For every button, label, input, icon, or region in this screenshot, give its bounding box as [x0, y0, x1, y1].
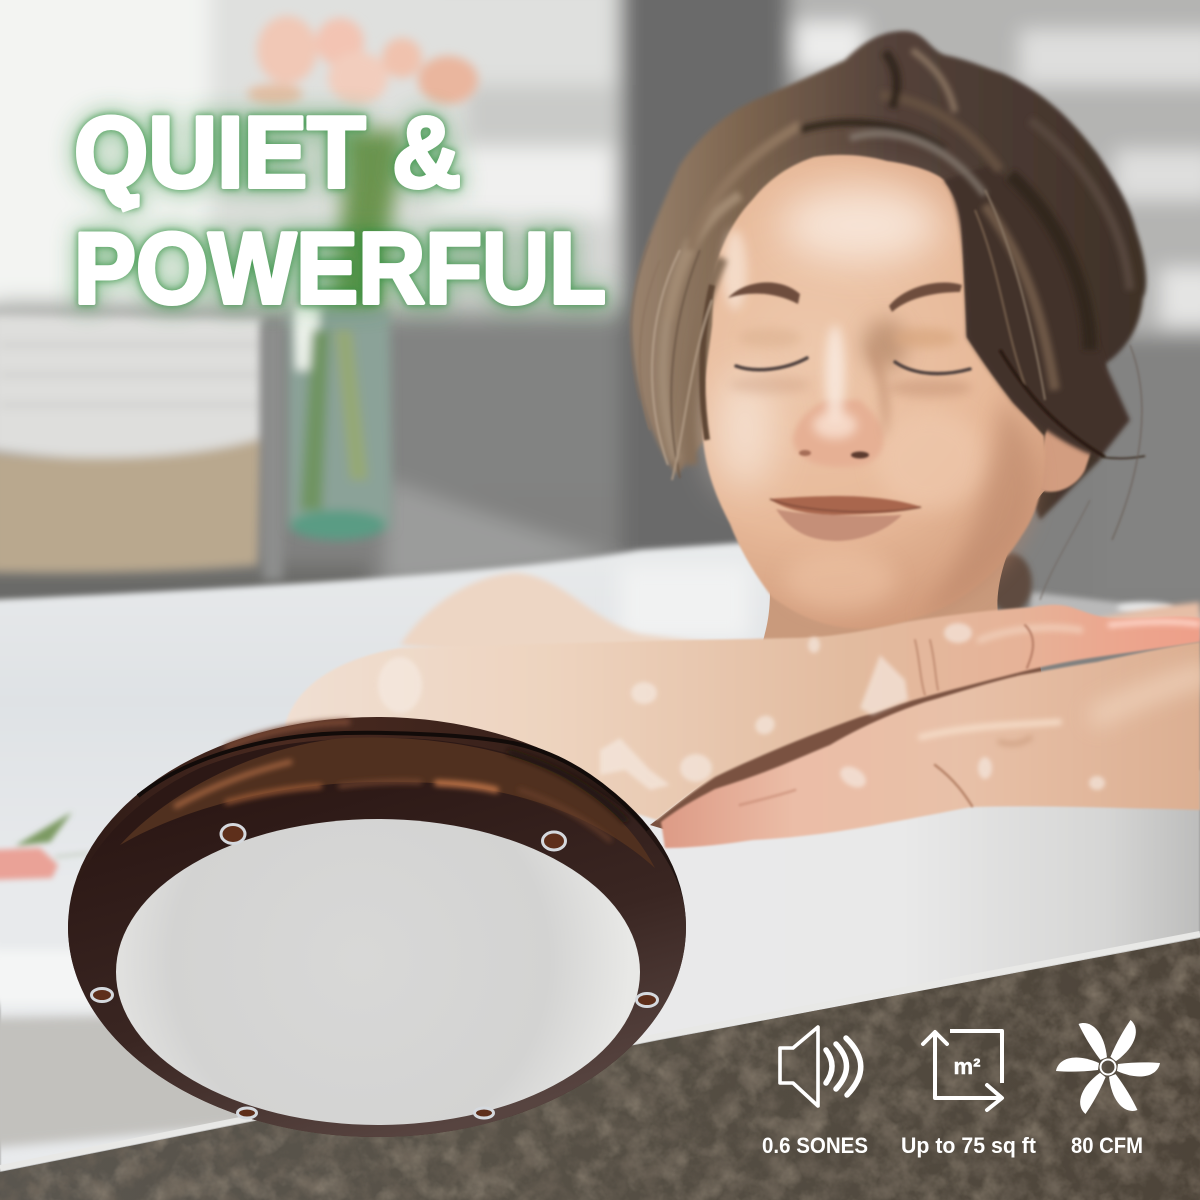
title glow: QUIET & [74, 97, 461, 209]
icon: fan [1056, 1017, 1160, 1117]
front ring [68, 738, 686, 1137]
label: area: Up to 75 sq ft [901, 1133, 1037, 1158]
far arm behind the hand [1100, 602, 1200, 640]
hair back [631, 31, 1146, 520]
woman [285, 31, 1200, 848]
frosted glass lens [116, 819, 640, 1125]
title [74, 97, 606, 325]
label: airflow: 80 CFM [1071, 1133, 1143, 1158]
eyebrows [728, 282, 962, 312]
title: POWERFUL [74, 213, 606, 325]
face highlights and shading [715, 187, 1036, 618]
icon: speaker [780, 1027, 861, 1106]
groove [138, 733, 648, 830]
icon: coverage area [923, 1031, 1002, 1110]
neck [762, 480, 1045, 645]
front forearm and hand [661, 642, 1200, 848]
copper sheen on upper lip [225, 722, 350, 748]
back forearm and hand [285, 605, 1200, 820]
title: QUIET & [74, 97, 461, 209]
title glow: POWERFUL [74, 213, 606, 325]
icon: coverage area: m² [954, 1054, 980, 1079]
shoulder [400, 573, 770, 670]
small pink flower on the tub [0, 812, 90, 880]
title glow: QUIET & [74, 97, 461, 209]
hair bun at neck [988, 553, 1032, 613]
water droplets and foam [378, 623, 1105, 792]
ear [1036, 365, 1108, 492]
bronze ceiling fan light [68, 717, 686, 1137]
title glow [74, 97, 606, 325]
copper highlights [176, 752, 625, 840]
hair front sweep on the right [944, 165, 1130, 458]
stone tub base [0, 934, 1200, 1200]
label: sones: 0.6 SONES [762, 1133, 868, 1158]
title glow: POWERFUL [74, 213, 606, 325]
flowers and vase [247, 16, 478, 540]
arm details [740, 622, 1200, 806]
screws [92, 824, 658, 1118]
upper bronze band [120, 737, 655, 868]
hair strands [631, 50, 1145, 600]
housing silhouette [68, 717, 686, 1137]
face [702, 155, 1045, 629]
basket [0, 313, 283, 580]
lips [770, 496, 921, 541]
shadow between the arms [650, 665, 1050, 840]
bathtub [0, 540, 1200, 1172]
closed eyes [736, 358, 970, 374]
nose [793, 325, 888, 467]
